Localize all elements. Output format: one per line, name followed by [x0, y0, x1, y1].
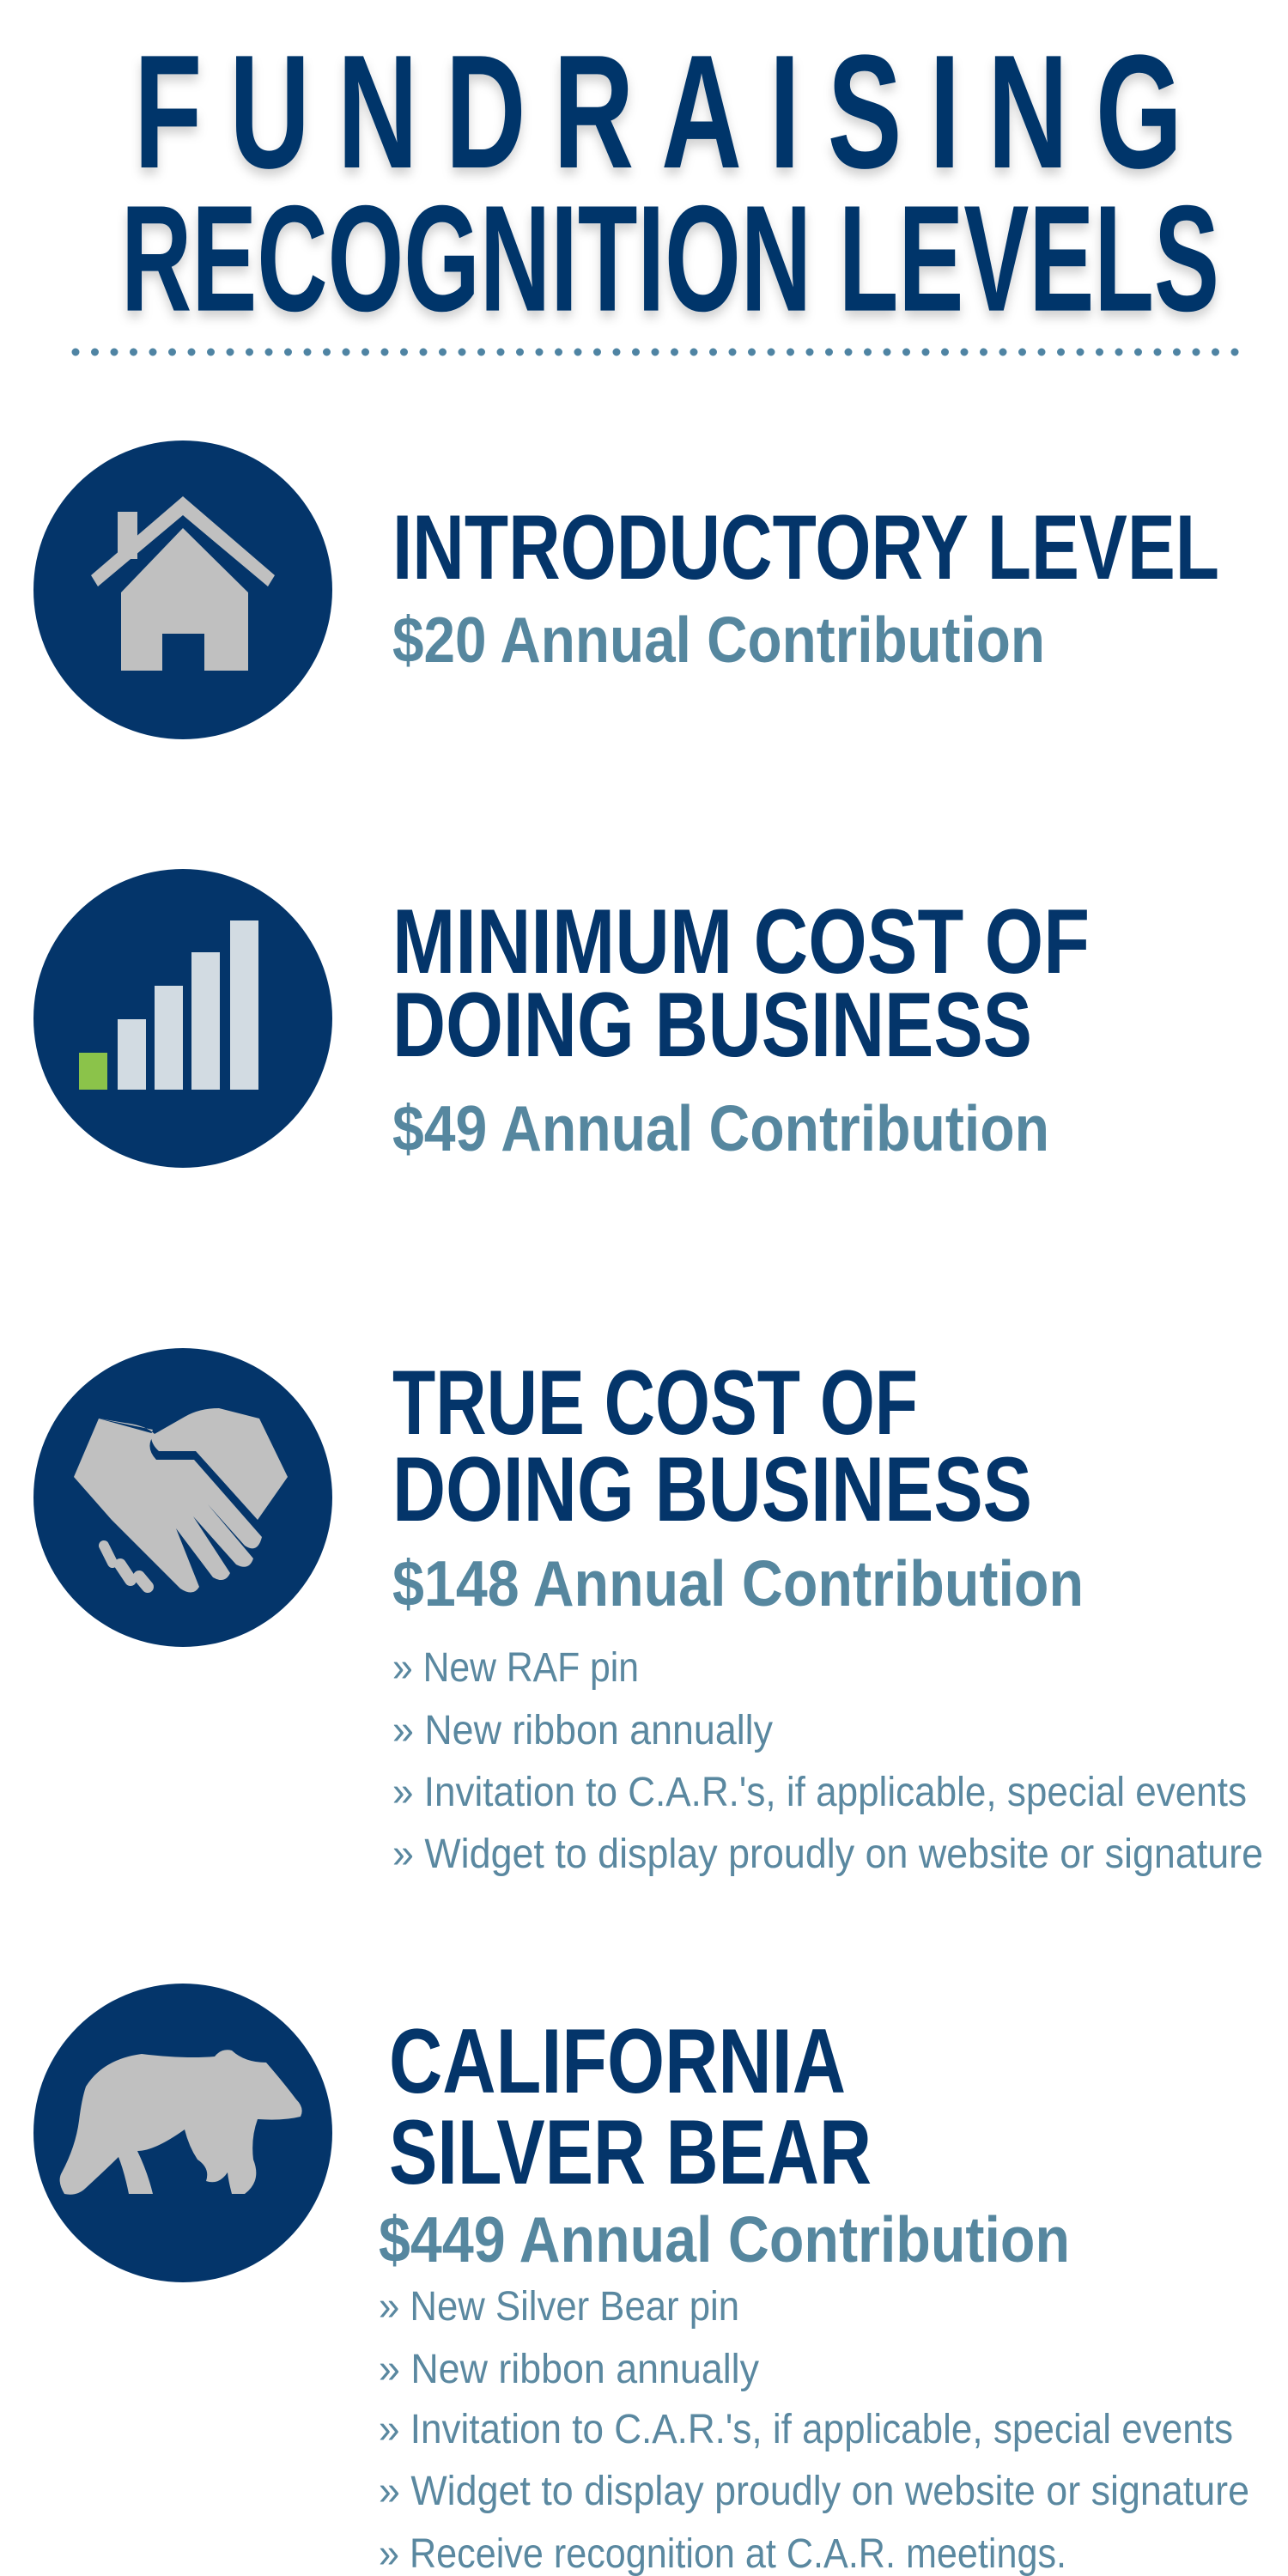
title: FUNDRAISING [134, 21, 1182, 203]
panel: true cost [33, 1348, 1263, 1877]
subtitle: $20 Annual Contribution [392, 604, 1045, 676]
subtitle: $449 Annual Contribution [379, 2203, 1070, 2275]
subtitle: $49 Annual Contribution [392, 1092, 1049, 1164]
benefits list: » New ribbon annually [392, 1708, 773, 1753]
panel: true cost: DOING BUSINESS [392, 1437, 1032, 1540]
benefits list: » Receive recognition at C.A.R. meetings. [379, 2531, 1066, 2576]
panel: california silver bear [33, 1984, 1249, 2576]
panel: minimum cost: DOING BUSINESS [392, 973, 1032, 1076]
icon: house [33, 440, 332, 739]
panel: introductory level [33, 440, 1219, 739]
subtitle: $148 Annual Contribution [392, 1547, 1084, 1619]
benefits list: » Widget to display proudly on website or signature [379, 2469, 1249, 2514]
icon: bear [33, 1984, 332, 2282]
heading: CALIFORNIA [389, 2009, 846, 2112]
title [121, 21, 1219, 343]
benefits list: » New ribbon annually [379, 2347, 759, 2392]
benefits list: » Invitation to C.A.R.'s, if applicable, special events [379, 2407, 1233, 2452]
icon: bar chart [33, 869, 332, 1168]
dotted divider [76, 349, 1236, 355]
benefits list: » New RAF pin [392, 1645, 639, 1691]
benefits list [379, 2284, 1249, 2576]
benefits list [392, 1645, 1263, 1877]
heading: MINIMUM COST OF [392, 890, 1090, 993]
panel: minimum cost [33, 869, 1090, 1168]
benefits list: » New Silver Bear pin [379, 2284, 739, 2330]
panel: california silver bear: SILVER BEAR [389, 2100, 872, 2203]
heading: TRUE COST OF [392, 1351, 918, 1454]
icon: handshake [33, 1348, 332, 1647]
title: RECOGNITION LEVELS [121, 174, 1219, 343]
